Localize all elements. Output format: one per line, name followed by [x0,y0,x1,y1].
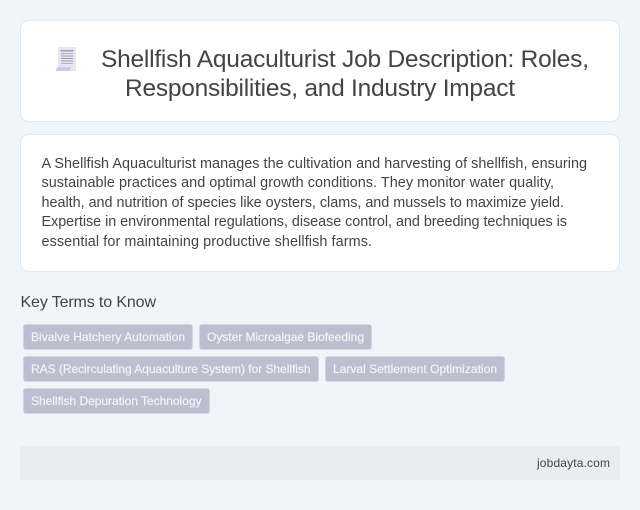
tag: bivalve hatchery automation [24,324,192,350]
heading: key terms: Key Terms to Know [20,294,156,311]
text block: description [42,156,587,250]
footer text: source: jobdayta.com [536,456,610,470]
tag: bivalve hatchery automation: Bivalve Hatchery Automation [31,330,185,344]
text block: description: sustainable practices and optimal growth conditions. They monitor water quality, [42,175,554,191]
icon: paper scroll [56,47,76,71]
tag: RAS for shellfish [24,356,318,382]
tag: RAS for shellfish: RAS (Recirculating Aquaculture System) for Shellfish [31,362,310,376]
text block: description: health, and nutrition of species like oysters, clams, and mussels to maximize yield. [42,195,564,211]
heading: title: Responsibilities, and Industry Impact [125,75,515,102]
tag: larval settlement optimization [326,356,504,382]
tags: key terms [24,324,504,414]
panel: description card [20,134,620,272]
tag: shellfish depuration technology: Shellfish Depuration Technology [31,394,202,408]
panel: header card [20,20,620,122]
tag: shellfish depuration technology [24,388,210,414]
heading: title [101,46,589,102]
footer bar [20,446,620,480]
tag: oyster microalgae biofeeding: Oyster Microalgae Biofeeding [207,330,364,344]
text block: description: Expertise in environmental regulations, disease control, and breeding techniques is [42,214,567,230]
tag: oyster microalgae biofeeding [200,324,372,350]
heading: title: Shellfish Aquaculturist Job Description: Roles, [101,46,589,73]
text block: description: A Shellfish Aquaculturist manages the cultivation and harvesting of shellfish, ensuring [42,156,587,172]
text block: description: essential for maintaining productive shellfish farms. [42,234,372,250]
tag: larval settlement optimization: Larval Settlement Optimization [333,362,497,376]
